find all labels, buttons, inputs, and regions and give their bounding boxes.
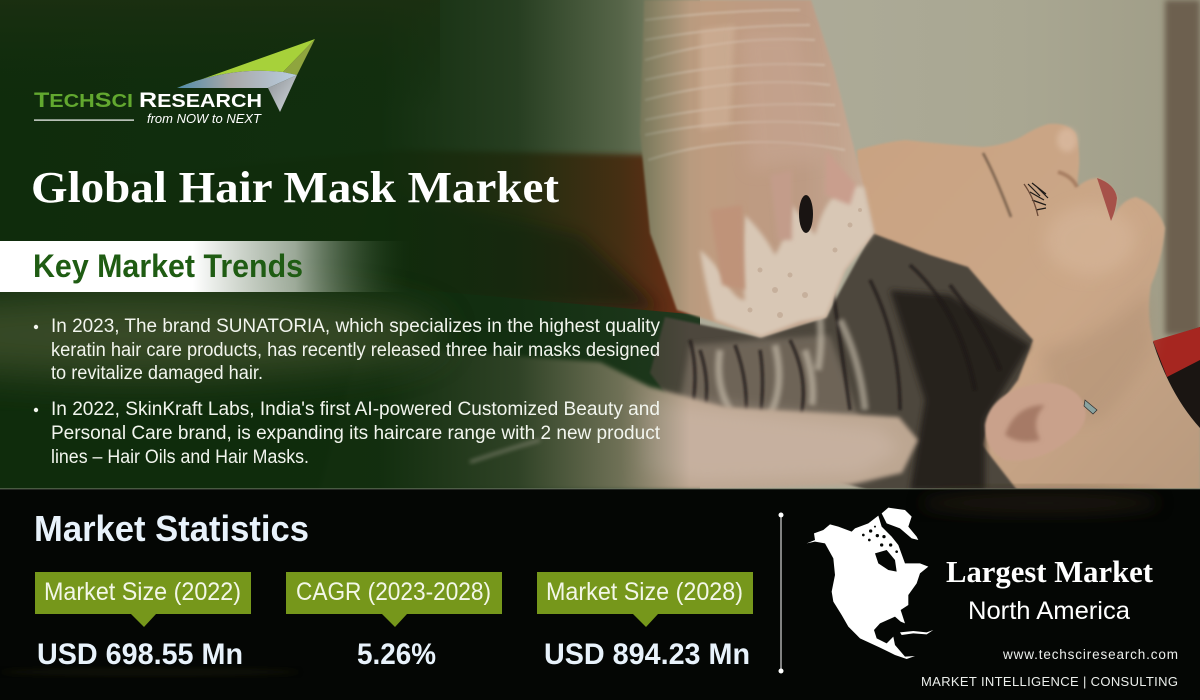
tagline: MARKET INTELLIGENCE | CONSULTING [921, 674, 1178, 689]
basin edge [426, 300, 700, 489]
website: www.techsciresearch.com [1002, 647, 1178, 662]
raised gloved hand [640, 0, 874, 337]
stat: market size 2022: USD 698.55 Mn [37, 638, 243, 671]
bullet list [34, 316, 661, 468]
olive glow behind bullets [0, 293, 440, 377]
vertical divider [778, 512, 784, 674]
left green overlay [0, 0, 690, 490]
bullet 2: lines – Hair Oils and Hair Masks. [51, 447, 309, 468]
bullet 1 [34, 316, 660, 384]
bullet 2 [34, 399, 661, 468]
stat: market size 2028: Market Size (2028) [546, 578, 743, 606]
foam bubbles [748, 208, 862, 318]
greenland [882, 508, 918, 540]
neck shadow [1048, 310, 1158, 410]
dark top shade [0, 0, 383, 18]
foam on fingers [700, 186, 874, 337]
finger shadows and scalp gap [710, 205, 745, 290]
logo underline [34, 120, 134, 121]
eyebrow and eye [983, 153, 1048, 217]
icon: north america map [807, 508, 933, 659]
stat: market size 2022: Market Size (2022) [44, 578, 241, 606]
logo wordmark: TECH SCI [34, 89, 133, 112]
lower gloved arm [408, 352, 920, 489]
heading: market statistics: Market Statistics [34, 508, 309, 549]
logo mark: paper plane [177, 39, 315, 112]
arctic speckles [862, 526, 898, 553]
bullet 1: In 2023, The brand SUNATORIA, which specializes in the highest quality [51, 316, 660, 337]
bottom statistics band [0, 488, 1200, 700]
stat: cagr: 5.26% [357, 638, 436, 671]
stat: market size 2028: USD 894.23 Mn [544, 638, 750, 671]
stat: market size 2022 [35, 572, 251, 671]
stat: cagr [286, 572, 502, 671]
basin highlight [470, 440, 540, 462]
bullet 1: keratin hair care products, has recently released three hair masks designed [51, 340, 660, 361]
hudson bay [875, 550, 897, 572]
key market trends band [0, 241, 410, 292]
largest market [946, 554, 1154, 625]
stat: cagr: CAGR (2023-2028) [296, 578, 491, 606]
logo [34, 39, 315, 126]
cheek highlight [1051, 210, 1128, 269]
section heading: key market trends: Key Market Trends [33, 248, 303, 284]
face and neck [857, 124, 1200, 490]
ear and earring [984, 384, 1098, 444]
bullet 2: In 2022, SkinKraft Labs, India's first AI-powered Customized Beauty and [51, 399, 660, 420]
nose and lips [1057, 128, 1117, 221]
bullet 1: to revitalize damaged hair. [51, 363, 263, 384]
stat: market size 2028 [537, 572, 753, 671]
bullet 2: Personal Care brand, is expanding its haircare range with 2 new product [51, 423, 661, 444]
caribbean islands [900, 630, 933, 635]
logo tagline: from NOW to NEXT [147, 111, 262, 126]
hair [650, 233, 1033, 490]
largest market: North America [968, 597, 1130, 625]
logo wordmark second part: RESEARCH [139, 89, 262, 112]
right headrest [1153, 327, 1200, 428]
title: Global Hair Mask Market [31, 163, 559, 212]
largest market: Largest Market [946, 554, 1154, 589]
hero photo: salon hair wash [0, 0, 1200, 490]
red chair [421, 150, 693, 314]
